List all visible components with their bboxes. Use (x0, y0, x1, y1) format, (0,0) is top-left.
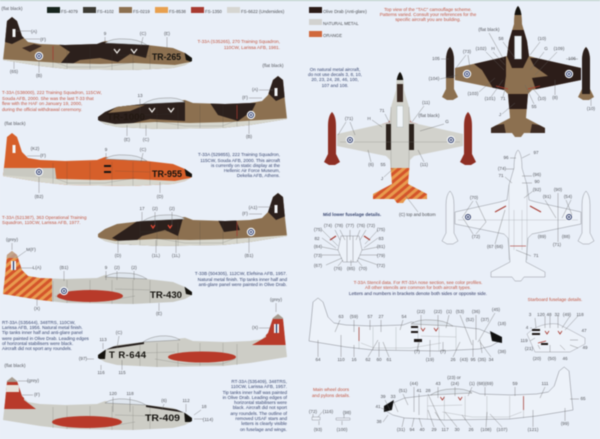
line drawing: lower stencil profile, nose left (384, 367, 573, 420)
caption: T-33A 521387: T-33A (521387), 363 Operational Training (2, 215, 87, 220)
note: natural metal aircraft decals: 107 and 108. (322, 83, 348, 88)
port fuselage callouts: (53) (456, 309, 465, 314)
caption: RT-33A S35644: of horizontal stabilisers were black. (2, 341, 73, 346)
aircraft 2 callouts: 13 (137, 93, 143, 98)
aircraft 4 callouts: (1L) (152, 253, 161, 258)
line drawing: starboard fuselage detail: 47 (581, 328, 587, 333)
line drawing callouts: (71) (553, 242, 562, 247)
underside view callouts (338, 100, 449, 212)
colour legend: FS swatches: FS-8538 (169, 9, 186, 14)
mid lower fuselage detail drawing: (74) (324, 223, 333, 228)
lower profile callouts: (121) (528, 427, 539, 432)
port fuselage callouts: 54 (401, 314, 407, 319)
caption: T-33A S35265: 110CW, Larissa AFB, 1981. (224, 45, 280, 50)
line drawing callouts: (74) (498, 166, 507, 171)
aircraft 3 callouts: (flat black) (4, 121, 26, 126)
caption: T-33A S35265 (198, 39, 280, 50)
port fuselage callouts: (19) (426, 357, 435, 362)
aircraft 7 callouts: (6) (161, 398, 167, 403)
underside view callouts: (6) (368, 162, 374, 167)
underside view callouts: G (445, 119, 449, 124)
line drawing: starboard fuselage detail: 32 (554, 312, 560, 317)
port fuselage callouts: (36) (472, 309, 481, 314)
aircraft 6 callouts (79, 297, 282, 375)
line drawing: starboard fuselage detail: 46 (562, 356, 568, 361)
mid lower fuselage detail drawing: (84) (314, 244, 323, 249)
underside view callouts: (flat black) (418, 113, 440, 118)
aircraft 3 callouts: (B2) (35, 194, 44, 199)
lower profile callouts: (24) (451, 381, 460, 386)
caption: RT-33A S35644: Aircraft did not sport any roundels. (2, 346, 72, 351)
lower profile callouts: (31) (397, 427, 406, 432)
heading: mid lower fuselage details: Mid lower fuselage details. (323, 212, 381, 217)
line drawing: starboard fuselage detail: 3 (529, 312, 532, 317)
aircraft 5: T-33B TR-430 natural metal with orange striped tail (2, 250, 193, 304)
aircraft 1 callouts: (C) (140, 31, 147, 36)
caption: RT-33A S35644: RT-33A (S35644), 348TRS, 110CW, (2, 320, 75, 325)
top view callouts: (109) (554, 46, 565, 51)
port fuselage callouts: (22) (417, 309, 426, 314)
underside view callouts: (71) (345, 116, 354, 121)
lower profile callouts: 29 (431, 427, 437, 432)
heading: main wheel doors and pylons details: Main wheel doors (313, 387, 350, 392)
heading: main wheel doors and pylons details (312, 387, 350, 398)
caption: T-33A 529855: is currently on static display at the (211, 163, 280, 168)
aircraft 1: T-33A TR-265 camouflage profile: TR-265 (152, 52, 182, 63)
lower profile callouts: (1) (469, 381, 475, 386)
lower profile callouts: 30 (454, 427, 460, 432)
caption: RT-33A S35644: Tip tanks inner half and anti-glare panel (2, 330, 83, 335)
port fuselage callouts: 16 (351, 357, 357, 362)
mid lower fuselage detail drawing: (79) (377, 253, 386, 258)
aircraft 4 callouts: (1L) (172, 253, 181, 258)
caption: T-33A 529855: T-33A (529855), 222 Training Squadron, (198, 152, 280, 157)
mid lower fuselage detail drawing: (77) (346, 223, 355, 228)
port fuselage callouts: 26 (450, 357, 456, 362)
aircraft 3 callouts: (C) (140, 147, 147, 152)
aircraft 5 callouts: M(F) (26, 247, 36, 252)
aircraft 6: RT-33A T R-644 natural metal, nose left: T R-644 (109, 350, 147, 361)
aircraft 4 callouts: (2) (169, 206, 175, 211)
aircraft 5 callouts: (2) (131, 265, 137, 270)
line drawing callouts: (67 (66) (487, 244, 504, 249)
aircraft 1 callouts: (E) (164, 31, 171, 36)
lower profile callouts: 26 (468, 427, 474, 432)
aircraft 7: RT-33A TR-409 natural metal (2, 376, 193, 430)
port fuselage callouts: 34 (488, 357, 494, 362)
port fuselage callouts: (35) (478, 357, 487, 362)
top view callouts (429, 27, 596, 117)
lower profile callouts: (51) (399, 388, 408, 393)
line drawing: starboard fuselage detail: (21) (525, 346, 534, 351)
port fuselage callouts: (38) (498, 349, 507, 354)
lower profile callouts: (44) (410, 381, 419, 386)
aircraft 5 callouts: (E) (156, 311, 163, 316)
aircraft 2: T-33A camouflage profile, nose left: TR-1000 (107, 112, 145, 123)
lower profile callouts: 38 (376, 419, 382, 424)
line drawing callouts (462, 150, 573, 258)
port fuselage callouts: 62 (365, 357, 371, 362)
top view: TAC camouflage planform (442, 4, 594, 144)
caption: T-33A S38000: flew with the HAF on January 19, 2000, (2, 101, 82, 106)
line drawing callouts: (54) (564, 194, 573, 199)
aircraft 1 callouts (1, 6, 171, 78)
line drawing callouts: (91) (543, 194, 552, 199)
note: natural metal aircraft decals: do not use decals 3, 8, 10, (308, 72, 362, 77)
caption: RT-33A S35644: Larissa AFB, 1956. Natural metal finish. (2, 325, 83, 330)
line drawing callouts: 97 (533, 150, 539, 155)
stencil data note: All other stencils are common for both aircraft types. (365, 285, 471, 290)
mid lower fuselage detail drawing: (76) (334, 266, 343, 271)
aircraft 4 callouts: (B1) (245, 253, 254, 258)
port fuselage callouts: (1) (446, 309, 452, 314)
aircraft 3 callouts: (K2) (31, 146, 40, 151)
caption: RT-33A 535409: in Olive Drab. Leading edges of (223, 395, 288, 400)
aircraft 5: T-33B TR-430 natural metal with orange striped tail: TR-430 (150, 290, 182, 301)
line drawing callouts: (88) (562, 234, 571, 239)
mid lower fuselage detail drawing: (73) (314, 253, 323, 258)
line drawing: starboard fuselage detail: 48 (546, 312, 552, 317)
aircraft 6 callouts: 115 (118, 370, 126, 375)
caption: RT-33A S35644 (2, 320, 90, 351)
aircraft 3 callouts: 9 (105, 147, 108, 152)
mid lower fuselage detail drawing: (75) (377, 227, 386, 232)
note: natural metal aircraft decals (308, 67, 362, 88)
top view callouts: (102) (476, 46, 487, 51)
port fuselage callouts: 57 (367, 314, 373, 319)
port fuselage callouts: 64 (315, 357, 321, 362)
aircraft 4 callouts: 17 (139, 206, 145, 211)
aircraft 6: RT-33A T R-644 natural metal, nose left (97, 314, 288, 368)
lower profile callouts (375, 375, 586, 432)
aircraft 6 callouts: 116 (97, 370, 105, 375)
mid lower fuselage detail drawing: (72) (377, 263, 386, 268)
line drawing callouts: (89) (538, 234, 547, 239)
caption: T-33A 529855: Hellenic Air Force Museum, (224, 168, 280, 173)
aircraft 6 callouts: (C) (116, 330, 123, 335)
aircraft 6 callouts: (X) (252, 325, 259, 330)
line drawing: starboard fuselage detail (520, 312, 588, 361)
aircraft 1 callouts: 9 (104, 31, 107, 36)
caption: T-33A 529855: 115CW, Souda AFB, 2000. This aircraft (200, 158, 281, 163)
caption: RT-33A 535409: horizontal stabilisers were (234, 400, 287, 405)
wheel doors and pylons drawing: (93) (314, 427, 323, 432)
aircraft 2 callouts: (B) (246, 134, 253, 139)
top view callouts: (10) (587, 106, 596, 111)
aircraft 5 callouts: 9 (105, 265, 108, 270)
caption: top view camouflage: Patterns varied. Consult your references for the (380, 12, 477, 17)
line drawing callouts: (70) (470, 195, 479, 200)
lower profile callouts: (68)(69) (477, 381, 494, 386)
aircraft 4 callouts (115, 205, 272, 258)
port fuselage callouts: (18) (498, 321, 507, 326)
line drawing callouts: (96) (533, 172, 542, 177)
aircraft 5 callouts: L(A) (33, 265, 42, 270)
mid lower fuselage detail drawing: 82 (314, 236, 320, 241)
port fuselage callouts: (45) (492, 307, 501, 312)
aircraft 2 callouts: (E) (124, 137, 131, 142)
lower profile callouts: 65 (580, 396, 586, 401)
aircraft 6 callouts: (97) (79, 356, 88, 361)
lower profile callouts: 39 (380, 394, 386, 399)
mid lower fuselage detail drawing (314, 223, 386, 271)
lower profile callouts: 59 (512, 381, 518, 386)
mid lower fuselage detail drawing: 83 (378, 236, 384, 241)
lower profile callouts: 111 (542, 381, 549, 386)
caption: T-33A 529855 (198, 152, 281, 178)
line drawing: starboard fuselage detail: (49) (563, 312, 572, 317)
top view callouts: 71 (500, 96, 506, 101)
aircraft 7 callouts: (flat black) (4, 363, 26, 368)
aircraft 5 callouts: (2) (114, 265, 120, 270)
lower profile callouts: 94 (409, 427, 415, 432)
port fuselage callouts: 95 (470, 357, 476, 362)
line drawing: starboard fuselage detail: 49 (582, 345, 588, 350)
mid lower fuselage detail drawing: (70) (359, 266, 368, 271)
top view callouts: 106 (568, 56, 576, 61)
port fuselage callouts: 60 (376, 357, 382, 362)
stencil data note: T-33A Stencil data. For RT-33A nose section, see color profiles. (354, 280, 482, 285)
line drawing callouts: 71 (498, 173, 504, 178)
top view callouts: 105 (432, 56, 440, 61)
line drawing: starboard fuselage detail: 120 (537, 312, 545, 317)
aircraft 6 callouts: (grey) (270, 297, 282, 302)
wheel doors and pylons drawing: (100) (337, 427, 348, 432)
heading: main wheel doors and pylons details: and pylons details. (312, 393, 350, 398)
mid lower fuselage detail drawing: (78) (335, 223, 344, 228)
aircraft 7 callouts: 120 (109, 391, 117, 396)
caption: T-33A S35265: T-33A (S35265), 270 Training Squadron, (198, 39, 280, 44)
mid lower fuselage detail drawing: (72) (367, 223, 376, 228)
top view callouts: (73) (463, 49, 472, 54)
wheel doors and pylons drawing: (98) (343, 410, 352, 415)
note: natural metal aircraft decals: On natural metal aircraft, (310, 67, 360, 72)
lower profile callouts: (108) (481, 427, 492, 432)
caption: T-33B 504305 (195, 271, 287, 287)
underside view callouts: 55 (380, 162, 386, 167)
lower profile callouts: 28 (425, 388, 431, 393)
line drawing: port fuselage stencil view (309, 298, 502, 351)
lower profile callouts: (23) or (447, 375, 461, 380)
aircraft 7 callouts: 118 (126, 391, 134, 396)
line drawing: starboard fuselage detail: 118 (576, 312, 584, 317)
colour legend: olive drab, natural metal, orange: Olive Drab (Anti-glare) (323, 9, 367, 14)
lower profile callouts: 33 (390, 394, 396, 399)
port fuselage callouts: 110 (337, 357, 345, 362)
top view callouts: (8) (552, 95, 558, 100)
port fuselage callouts: (22) (434, 309, 443, 314)
line drawing callouts: 71 (533, 253, 539, 258)
note: (C) top and bottom: (C) top and bottom (399, 212, 436, 217)
aircraft 4: T-33A camouflage profile, nose left (97, 192, 288, 246)
top view callouts: (flat black) (478, 27, 500, 32)
caption: T-33B 504305: T-33B (504305), 112CW, Elefsina AFB, 1957. (195, 271, 287, 276)
lower profile callouts: (107) (497, 427, 508, 432)
underside view callouts: J (381, 176, 383, 181)
underside view callouts: (11) (420, 162, 428, 167)
aircraft 2 callouts: (F) (242, 95, 248, 100)
aircraft 1 callouts: (F) (40, 37, 46, 42)
lower profile callouts: 41 (375, 404, 381, 409)
aircraft 7 callouts: 112 (182, 398, 190, 403)
colour legend: FS swatches: FS-4079 (61, 9, 78, 14)
caption: top view camouflage: specific aircraft you are building. (395, 17, 461, 22)
colour legend: olive drab, natural metal, orange: ORANGE (323, 33, 342, 38)
port fuselage callouts: (52) (466, 317, 475, 322)
aircraft 5 callouts (6, 237, 163, 316)
caption: RT-33A 535409: black. Aircraft did not sport (233, 405, 288, 410)
stencil data note (349, 280, 487, 296)
aircraft 2 callouts: (C) (143, 137, 150, 142)
caption: T-33B 504305: Natural metal finish. Tip tanks inner half and (198, 277, 287, 282)
line drawing callouts: 90 (534, 179, 540, 184)
caption: T-33B 504305: anti-glare panel were painted in Olive Drab. (199, 282, 287, 287)
caption: T-33A S38000: during the official withdrawal ceremony. (2, 107, 82, 112)
mid lower fuselage detail drawing: (76) (357, 223, 366, 228)
top view callouts: 58 (498, 36, 504, 41)
aircraft 3 callouts: (F) (40, 153, 46, 158)
aircraft 2: T-33A camouflage profile, nose left (97, 75, 288, 130)
underside view callouts: (11) (422, 100, 430, 105)
caption: RT-33A 535409 (223, 379, 288, 432)
line drawing callouts: 96 (503, 155, 509, 160)
caption: RT-33A 535409: on fuselage and wings. (240, 427, 287, 432)
caption: T-33A S38000: T-33A (S38000), 222 Training Squadron, 115CW, (2, 90, 102, 95)
port fuselage callouts: 27 (378, 314, 384, 319)
caption: RT-33A 535409: RT-33A (535409), 348TRS, (231, 379, 287, 384)
mid lower fuselage detail drawing: (85) (347, 266, 356, 271)
port fuselage callouts: (7) (414, 349, 420, 354)
colour legend: FS swatches (47, 7, 285, 14)
top view callouts: H (491, 46, 495, 51)
caption: RT-33A S35644: were painted in Olive Drab. Leading edges (2, 336, 90, 341)
wheel doors and pylons drawing (309, 409, 352, 432)
lower profile callouts: 40 (419, 427, 425, 432)
caption: T-33A 521387 (2, 215, 87, 225)
aircraft 3: T-33A TR-955 orange profile (2, 132, 193, 186)
line drawing: starboard fuselage detail: 4 (526, 325, 529, 330)
heading: starboard fuselage details: Starboard fuselage details. (528, 297, 582, 302)
line drawing callouts: (72) (472, 234, 481, 239)
top view callouts: (103) (468, 91, 479, 96)
lower profile callouts: 117 (441, 427, 449, 432)
top view callouts: 55 (531, 104, 537, 109)
caption: RT-33A 535409: 110CW, Larissa AFB, 1957. (231, 384, 287, 389)
aircraft 2 callouts: (A) (252, 87, 259, 92)
line drawing callouts: (90) (554, 187, 563, 192)
colour legend: FS swatches: FS-4102 (97, 9, 114, 14)
aircraft 1 callouts: (65) (10, 69, 19, 74)
line drawing callouts: (92) (533, 187, 542, 192)
port fuselage callouts (315, 307, 507, 362)
colour legend: FS swatches: FS-6622 (Undersides) (241, 9, 285, 14)
aircraft 1 callouts: (flat black) (1, 6, 23, 11)
aircraft 2 callouts: (flat black) (262, 63, 284, 68)
port fuselage callouts: (37) (481, 317, 490, 322)
mid lower fuselage detail drawing: (67) (314, 263, 323, 268)
mid lower fuselage detail drawing: (81) (377, 244, 386, 249)
underside view callouts: 71 (379, 108, 385, 113)
port fuselage callouts: (43) (460, 357, 469, 362)
aircraft 7 callouts: 18 (201, 404, 207, 409)
wheel doors and pylons drawing: (72) (309, 409, 318, 414)
aircraft 3: T-33A TR-955 orange profile: TR-955 (152, 169, 183, 180)
top view callouts: (10) (538, 96, 547, 101)
stencil data note: Letters and numbers in brackets denote both sides or opposite side. (349, 291, 487, 296)
aircraft 7: RT-33A TR-409 natural metal: TR-409 (145, 413, 180, 424)
aircraft 7 callouts (4, 363, 214, 422)
colour legend: FS swatches: FS-0219 (133, 9, 150, 14)
aircraft 7 callouts: (grey) (27, 378, 39, 383)
caption: RT-33A 535409: Tip tanks inner half was painted (223, 390, 287, 395)
port fuselage callouts: (59) (350, 314, 359, 319)
aircraft 4 callouts: (A1) (249, 205, 258, 210)
aircraft 1: T-33A TR-265 camouflage profile (2, 16, 193, 70)
aircraft 4 callouts: (2) (152, 206, 158, 211)
lower profile callouts: 43 (435, 381, 441, 386)
top view callouts: G (544, 46, 548, 51)
caption: RT-33A 535409: removed USAF stars and (235, 416, 287, 421)
underside view: natural metal with striped tail (324, 70, 476, 210)
aircraft 1 callouts: (A) (31, 29, 38, 34)
mid lower fuselage detail drawing: (75) (314, 227, 323, 232)
port fuselage callouts: (7) (440, 349, 446, 354)
colour legend: FS swatches: FS-1350 (205, 9, 222, 14)
line drawing: starboard fuselage detail: (50) (548, 356, 557, 361)
caption: RT-33A 535409: letters is clearly visible (241, 421, 287, 426)
aircraft 5 callouts: (grey) (6, 237, 18, 242)
top view callouts: (10) (538, 36, 547, 41)
port fuselage callouts: 63 (338, 314, 344, 319)
aircraft 3 callouts (4, 121, 164, 199)
aircraft 4 callouts: (D) (115, 253, 122, 258)
note: natural metal aircraft decals: 20, 23, 24, 28, 46, 100, (311, 77, 359, 82)
caption: RT-33A 535409: any roundels. The outline of (230, 411, 288, 416)
lower profile callouts: 41 (416, 388, 422, 393)
line drawing: starboard fuselage detail: (20) (533, 356, 542, 361)
caption: T-33A S38000: Souda AFB, 2000. She was the last T-33 that (2, 96, 94, 101)
caption: top view camouflage: Top view of the "TAC" camouflage scheme. (384, 7, 472, 12)
colour legend: olive drab, natural metal, orange (309, 7, 367, 38)
aircraft 7 callouts: (F) (34, 392, 40, 397)
line drawing: top planform stencil view (442, 150, 594, 281)
caption: top view camouflage (380, 7, 477, 22)
port fuselage callouts: 61 (386, 357, 392, 362)
line drawing: starboard fuselage detail: 119 (520, 338, 528, 343)
aircraft 2 callouts (124, 63, 284, 142)
aircraft 5 callouts: (X) (34, 306, 41, 311)
top view callouts: (104) (429, 76, 440, 81)
wheel doors and pylons drawing: (116) (323, 409, 334, 414)
aircraft 7 callouts: (114) (203, 417, 214, 422)
caption: T-33A S38000 (2, 90, 102, 112)
aircraft 3 callouts: (D) (157, 194, 164, 199)
aircraft 1 callouts: (B) (36, 73, 43, 78)
colour legend: olive drab, natural metal, orange: NATURAL METAL (323, 21, 359, 26)
underside view callouts: H (367, 116, 371, 121)
aircraft 5 callouts: (B1) (60, 265, 69, 270)
aircraft 4 callouts: (F) (242, 211, 248, 216)
caption: T-33A 529855: Dekelia AFB, Athens. (237, 173, 280, 178)
top view callouts: (101) (485, 96, 496, 101)
aircraft 6 callouts: 113 (99, 337, 107, 342)
caption: T-33A 521387: Squadron, 110CW, Larissa AFB, 1977. (2, 220, 81, 225)
lower profile callouts: (99) (561, 421, 570, 426)
top view callouts: J (499, 112, 501, 117)
